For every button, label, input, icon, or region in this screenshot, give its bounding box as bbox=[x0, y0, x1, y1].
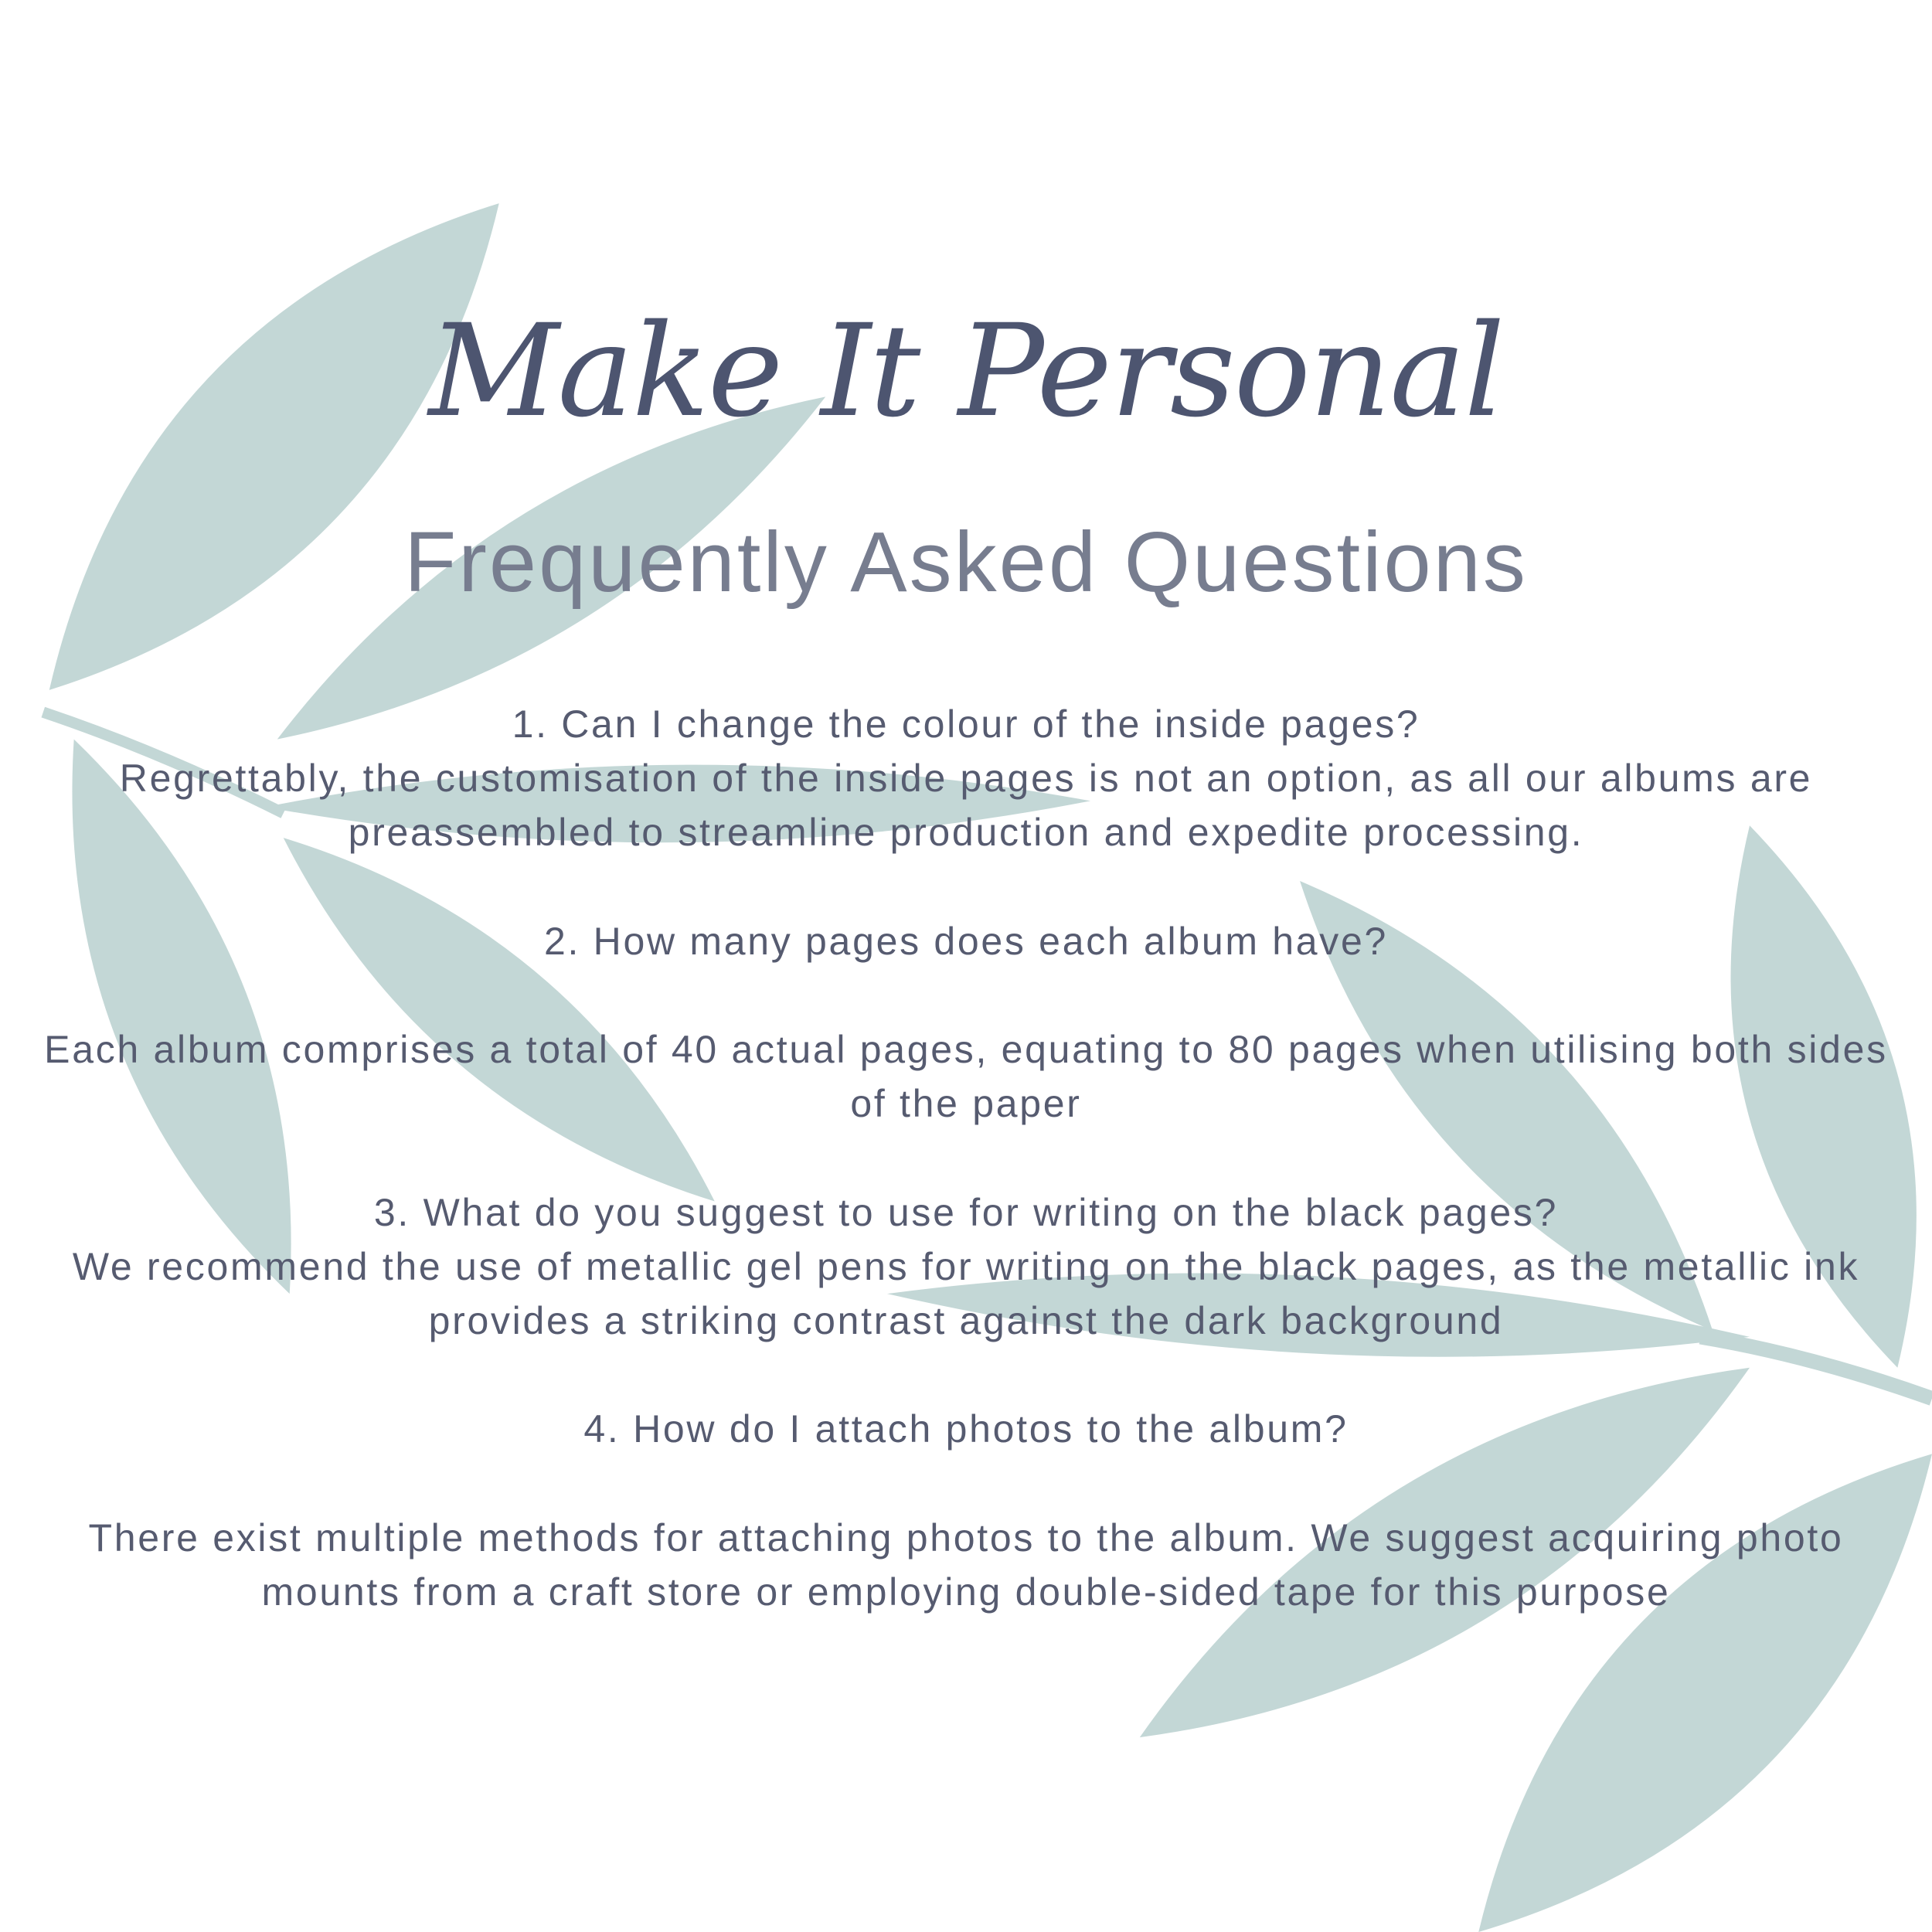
FAQ text block: mounts from a craft store or employing double-sided tape for this purpose bbox=[262, 1570, 1670, 1614]
FAQ text block: 4. How do I attach photos to the album? bbox=[583, 1407, 1349, 1451]
title: Make It Personal bbox=[429, 297, 1503, 445]
FAQ text block: of the paper bbox=[850, 1082, 1082, 1125]
FAQ text block: preassembled to streamline production and expedite processing. bbox=[349, 811, 1583, 854]
FAQ text block: 2. How many pages does each album have? bbox=[544, 920, 1388, 963]
FAQ text block: Each album comprises a total of 40 actual pages, equating to 80 pages when utilising both sides bbox=[44, 1028, 1888, 1071]
FAQ text block: We recommend the use of metallic gel pens for writing on the black pages, as the metallic ink bbox=[73, 1245, 1859, 1288]
FAQ text block: There exist multiple methods for attaching photos to the album. We suggest acquiring photo bbox=[88, 1516, 1844, 1560]
subtitle: Frequently Asked Questions bbox=[404, 515, 1528, 610]
left branch bbox=[43, 203, 1090, 1294]
FAQ text block: provides a striking contrast against the dark background bbox=[429, 1299, 1503, 1342]
right branch bbox=[887, 825, 1932, 1932]
FAQ text block: 3. What do you suggest to use for writing on the black pages? bbox=[374, 1191, 1558, 1234]
FAQ text block: Regrettably, the customisation of the inside pages is not an option, as all our albums are bbox=[120, 757, 1812, 800]
FAQ text block: 1. Can I change the colour of the inside pages? bbox=[512, 702, 1420, 746]
FAQ text block bbox=[44, 702, 1888, 1614]
